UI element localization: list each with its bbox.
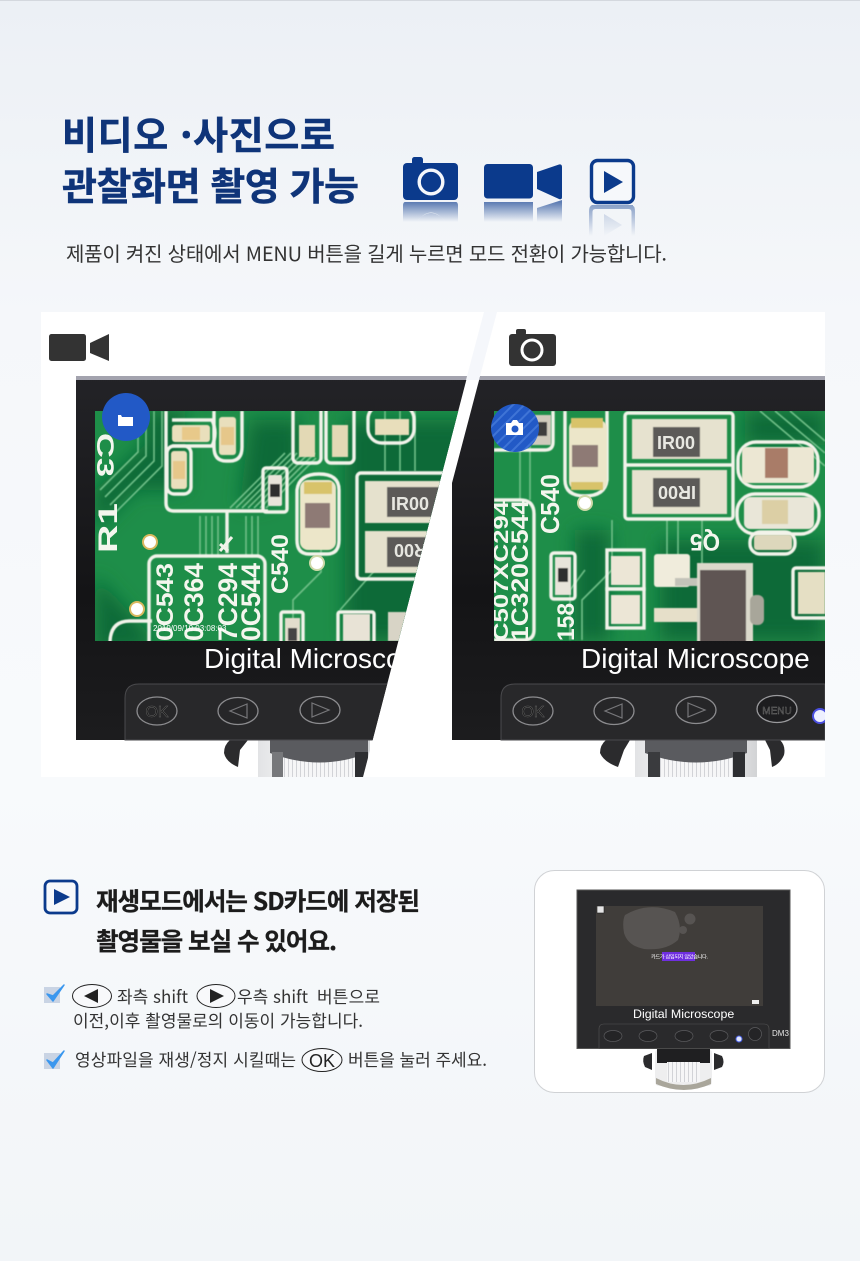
PCB silkscreen labels: C507XC294 xyxy=(490,501,513,641)
panel: photo mode monitor xyxy=(452,329,833,777)
panel: video mode monitor xyxy=(49,334,476,777)
white silkscreen outlines xyxy=(494,411,833,640)
icon: camera dark xyxy=(509,329,556,366)
model label: DM3 xyxy=(772,1029,789,1038)
checklist: shift buttons xyxy=(44,983,380,1032)
PCB silkscreen labels: 7C294 xyxy=(213,563,243,641)
checklist: shift buttons: 좌측 shift xyxy=(117,983,189,1008)
PCB silkscreen labels: IR00 xyxy=(394,540,432,560)
PCB hole xyxy=(578,496,592,510)
subtitle: 제품이 켜진 상태에서 MENU 버튼을 길게 누르면 모드 전환이 가능합니다. xyxy=(66,238,667,267)
white silkscreen outlines xyxy=(108,411,443,641)
PCB silkscreen labels xyxy=(490,433,720,641)
PCB silkscreen labels: IR00 xyxy=(657,433,695,453)
PCB silkscreen labels: 0C364 xyxy=(179,563,209,641)
monitor body xyxy=(76,376,476,740)
PCB silkscreen labels: 1C320C544 xyxy=(507,499,534,641)
diagonal divider band xyxy=(466,312,497,380)
monitor brand text: Digital Microscope xyxy=(581,643,810,674)
PCB silkscreen labels: 0C543 xyxy=(152,563,179,641)
icon: play section marker xyxy=(45,881,77,913)
playback screen: 카드가 삽입되지 않았습니다. xyxy=(651,952,709,960)
panel: mode comparison photos xyxy=(41,312,833,777)
mode badge: photo xyxy=(491,404,539,452)
icon reflections xyxy=(403,200,635,236)
playback heading: 촬영물을 보실 수 있어요. xyxy=(96,923,337,958)
monitor body xyxy=(452,376,825,740)
PCB silkscreen labels xyxy=(91,433,432,641)
checklist: OK button xyxy=(44,1046,487,1072)
monitor brand text: Digital Microscope xyxy=(633,1007,734,1021)
PCB screen video mode xyxy=(95,411,458,641)
icon: play button xyxy=(592,160,634,202)
left shift button xyxy=(72,984,112,1008)
panel: playback photo card xyxy=(534,870,824,1092)
right shift button xyxy=(197,984,235,1008)
playback heading: 재생모드에서는 SD카드에 저장된 xyxy=(96,883,420,918)
title: 관찰화면 촬영 가능 xyxy=(62,156,359,211)
PCB silkscreen labels: Q5 xyxy=(690,528,720,555)
monitor xyxy=(577,890,790,1048)
mode badge: video xyxy=(102,393,150,441)
PCB shading xyxy=(575,411,825,641)
monitor brand text: Digital Microscope xyxy=(204,643,433,674)
button bar xyxy=(124,684,388,740)
OK button xyxy=(302,1048,342,1072)
PCB silkscreen labels: C3 xyxy=(91,433,118,477)
button bar: OK xyxy=(145,704,169,721)
microscope stand right xyxy=(600,740,784,777)
components xyxy=(171,417,450,648)
button bar xyxy=(599,1024,769,1048)
PCB shading xyxy=(95,411,475,650)
microscope stand left xyxy=(224,740,370,777)
checklist: shift buttons: 버튼으로 xyxy=(317,983,380,1008)
PCB silkscreen labels: 0C544 xyxy=(236,563,266,641)
button bar: MENU xyxy=(762,706,792,717)
PCB silkscreen labels: IR00 xyxy=(658,482,696,502)
PCB screen photo mode xyxy=(490,411,833,643)
PCB silkscreen labels: IR00 xyxy=(391,494,429,514)
PCB silkscreen labels: R1 xyxy=(93,503,123,553)
icon: check xyxy=(44,985,64,1003)
icon: video camera dark xyxy=(49,334,109,361)
PCB silkscreen labels: C540 xyxy=(535,474,565,534)
timestamp: 2019/09/19 03:08:03 xyxy=(153,624,227,633)
checklist: shift buttons: 이전,이후 촬영물로의 이동이 가능합니다. xyxy=(73,1007,363,1032)
title xyxy=(62,105,359,211)
checklist: shift buttons: 우측 shift xyxy=(237,983,309,1008)
button bar: OK xyxy=(521,704,545,721)
playback screen xyxy=(596,906,763,1006)
playback heading xyxy=(96,883,420,958)
icon: check xyxy=(44,1051,64,1069)
PCB silkscreen labels: 158 xyxy=(553,603,580,641)
PCB holes xyxy=(130,535,324,616)
power LED xyxy=(813,709,827,723)
button bar xyxy=(501,684,827,740)
checklist: OK button: 버튼을 눌러 주세요. xyxy=(348,1046,487,1071)
title: 비디오 ·사진으로 xyxy=(62,105,335,160)
PCB silkscreen labels: C540 xyxy=(267,534,294,594)
components xyxy=(531,415,825,643)
OK button: OK xyxy=(309,1051,335,1071)
checklist: OK button: 영상파일을 재생/정지 시킬때는 xyxy=(75,1046,296,1071)
icon: video camera xyxy=(484,164,562,199)
icon: camera xyxy=(403,157,458,200)
microscope stand xyxy=(643,1049,724,1090)
